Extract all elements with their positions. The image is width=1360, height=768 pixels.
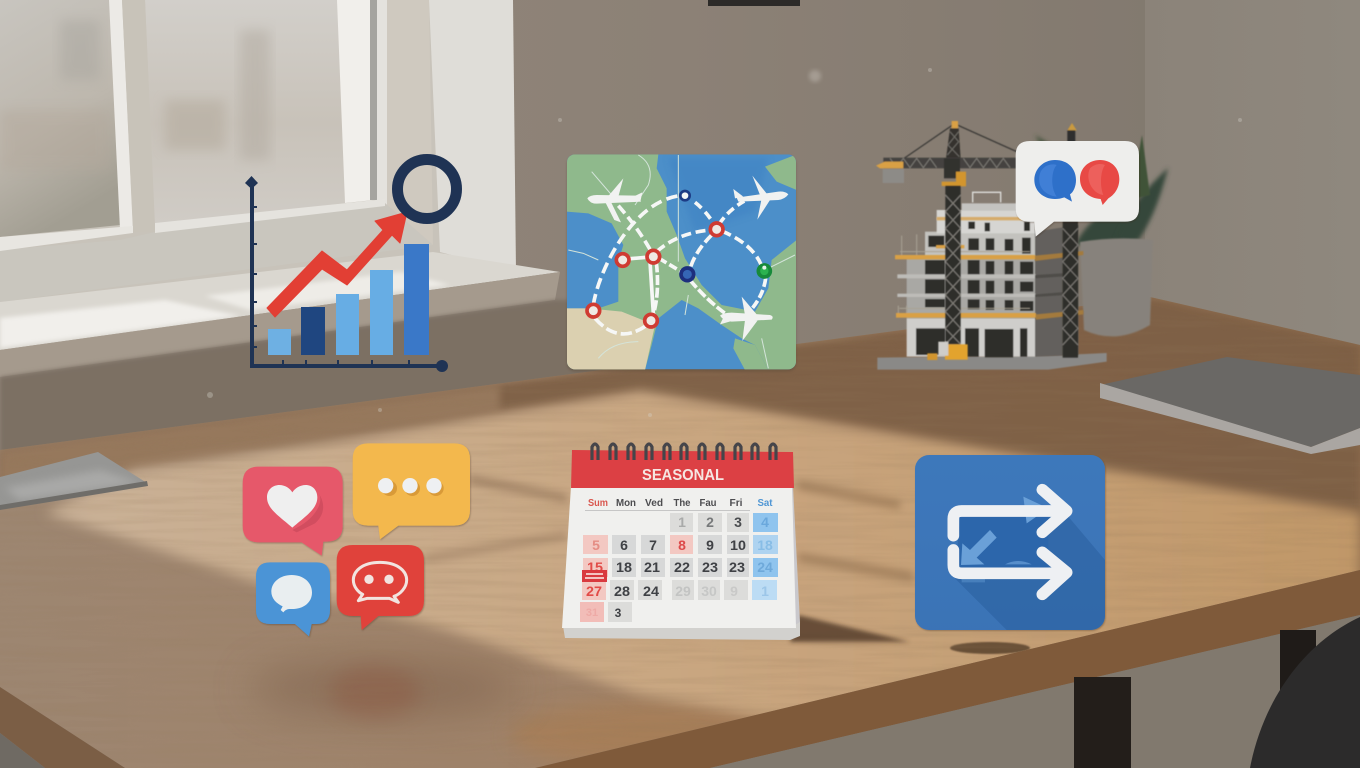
map water [567,154,796,369]
red chat icon [1080,160,1119,205]
calendar dates: 6 [620,537,628,553]
calendar dates: 5 [592,537,600,553]
map planes [587,176,788,341]
calendar header [571,450,794,488]
building base slab [877,353,1107,370]
icon: building under construction with cranes and chat bubble [876,121,1139,370]
weekday labels: The [674,497,691,509]
chart bars [268,244,429,355]
calendar pages [563,622,800,640]
calendar dates: 9 [730,583,738,599]
glass panes [0,0,120,237]
blue chat bubble [256,562,330,636]
calendar dates: 27 [586,583,602,599]
calendar binding rings [592,444,776,460]
calendar dates: 18 [757,537,773,553]
icon: flight route map [567,154,797,371]
icon: blue repeat / transfer arrows tile [915,455,1105,632]
desk [0,297,1360,768]
calendar dates: 22 [674,559,690,575]
speech bubble with blue and red chat icons [1016,141,1139,237]
calendar dates: 23 [702,559,718,575]
window bar shadows [469,474,567,503]
warm front-centre wood [514,702,741,760]
calendar dates: 23 [729,559,745,575]
calendar dates: 8 [678,537,686,553]
red chat bubble [337,545,424,630]
white loop arrows [953,490,1067,594]
tower crane left [876,121,1017,360]
map routes [593,196,766,334]
weekday labels: Fri [730,497,743,509]
weekday labels: Sum [588,497,608,509]
picture frame edge at the top of the wall [708,0,800,6]
building body [897,192,1078,357]
calendar dates: 1 [678,514,686,530]
calendar shadow [790,615,910,642]
calendar dates: 2 [706,514,714,530]
icon: growth bar chart with arrow and ring [245,160,456,372]
calendar dates: 7 [649,537,657,553]
small pale arrows [961,497,1048,582]
dust motes [207,68,1242,417]
icon: seasonal desk calendar [562,444,910,642]
rising red arrow [267,212,407,317]
weekday labels: Sat [758,497,773,509]
desk front edge [0,687,125,768]
tile [915,455,1105,630]
tile cast shadow [950,642,1030,654]
calendar dates: 3 [734,514,742,530]
floating icon reflection [250,658,520,718]
desk leg and wall under desk [0,615,1360,768]
calendar dates: 1 [761,583,769,599]
weekday labels [585,497,773,511]
frame bottom rail [0,203,433,302]
calendar dates: 10 [730,537,746,553]
calendar dates [582,514,773,620]
calendar dates: 18 [616,559,632,575]
yellow typing bubble [353,443,470,539]
laptop right [1100,357,1360,454]
calendar dates: 29 [675,583,691,599]
far shaded band [0,297,1360,513]
calendar dates: 24 [643,583,659,599]
weekday labels: Mon [616,497,636,509]
map land [567,154,797,370]
weekday labels: Ved [645,497,663,509]
blue chat icon [1034,160,1076,202]
icon: social media reaction bubbles [243,443,470,636]
calendar dates: 4 [761,514,769,530]
calendar dates: 3 [615,606,622,620]
calendar cells [580,513,778,622]
calendar title: SEASONAL [642,467,724,484]
calendar dates: 31 [586,607,598,619]
window sill [0,252,560,377]
calendar dates: 30 [701,583,717,599]
calendar dates: 21 [644,559,660,575]
pink heart bubble [243,467,343,556]
tower crane right [1063,123,1078,358]
frame posts [109,0,133,229]
heart [267,485,317,528]
chart axes [245,176,448,372]
window [0,0,516,305]
calendar dates: 28 [614,583,630,599]
wall below sill [0,300,640,470]
laptop left [0,452,148,510]
orange scaffolding floors [895,217,1083,320]
weekday labels: Fau [700,497,716,509]
calendar dates: 9 [706,537,714,553]
calendar dates: 24 [757,559,773,575]
long shadow [955,515,1105,632]
wood grain [78,427,1114,651]
target ring [398,160,456,218]
sunlit region [45,392,1360,725]
map pins [587,191,770,327]
calendar dates: 15 [587,559,603,575]
plant in pot [1035,135,1168,336]
chair [1250,617,1360,768]
